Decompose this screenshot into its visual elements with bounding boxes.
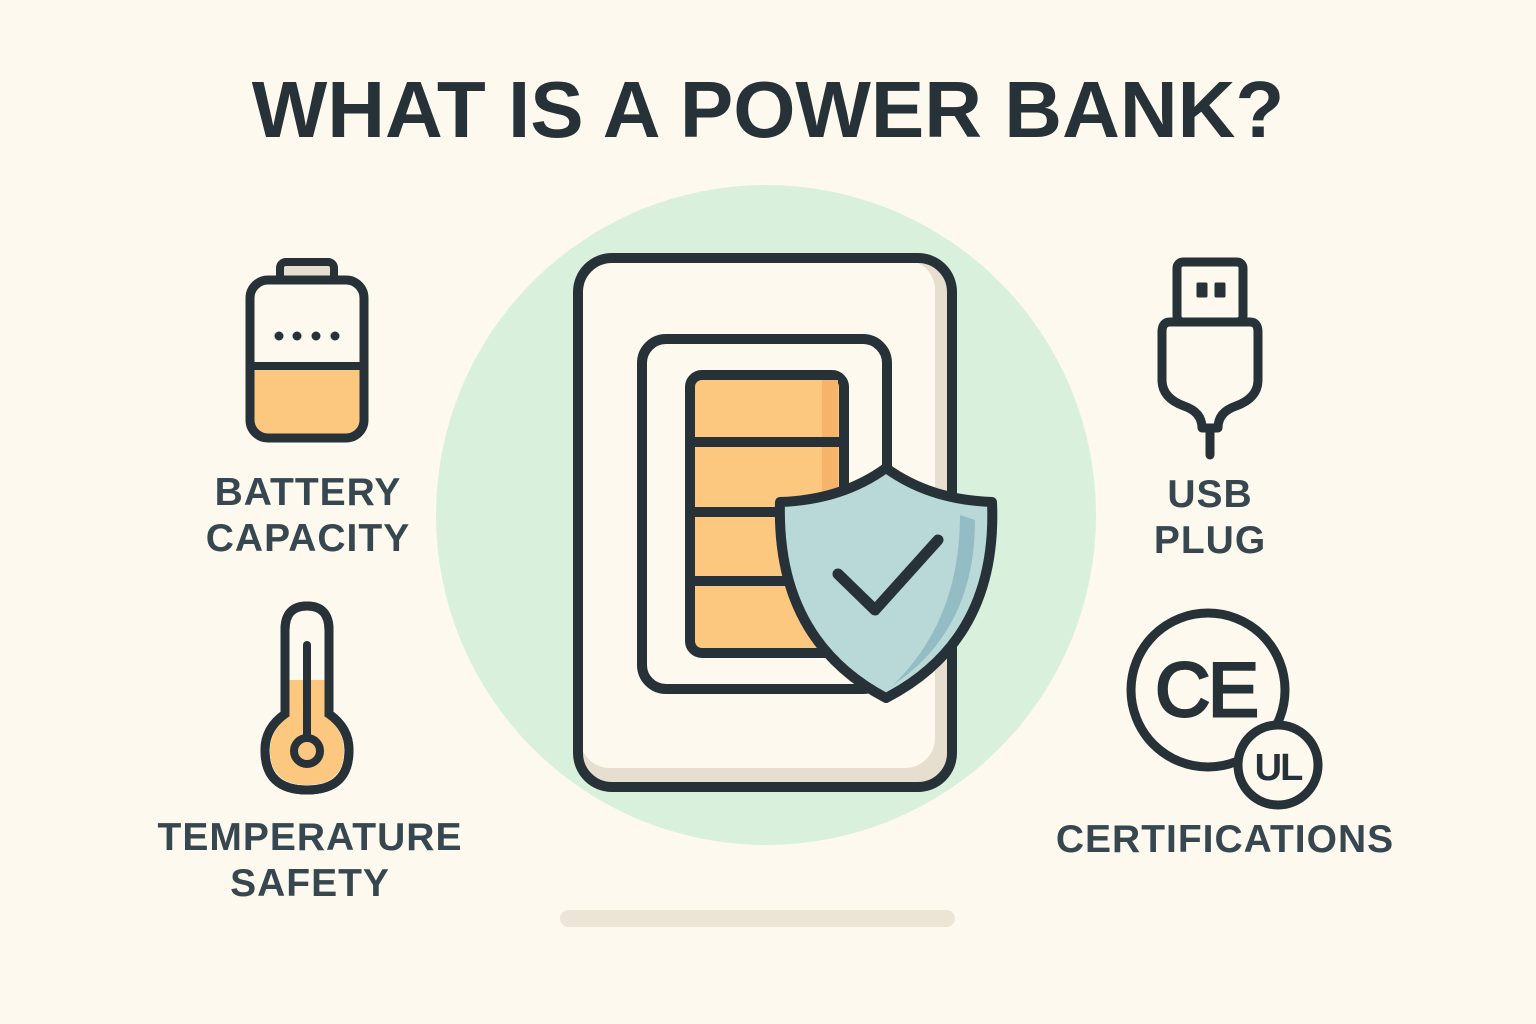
icon: battery (250, 262, 364, 438)
label: temperature safety: SAFETY (230, 862, 390, 905)
label: usb plug (1154, 473, 1266, 562)
icon: thermometer (265, 606, 349, 790)
label: usb plug: PLUG (1154, 519, 1266, 562)
label: temperature safety: TEMPERATURE (158, 816, 462, 859)
label: battery capacity: BATTERY (215, 471, 401, 514)
icon: certifications (1131, 613, 1318, 805)
icon: shield with check (780, 468, 992, 698)
ground shadow (560, 910, 955, 927)
label: battery capacity (206, 471, 410, 560)
icon: usb plug (1162, 262, 1258, 455)
title: WHAT IS A POWER BANK? (252, 65, 1284, 154)
icon: certifications: CE (1155, 648, 1257, 733)
label: battery capacity: CAPACITY (206, 517, 410, 560)
label: certifications: CERTIFICATIONS (1056, 818, 1394, 861)
background circle (436, 185, 1096, 845)
label: temperature safety (158, 816, 462, 905)
label: usb plug: USB (1167, 473, 1253, 516)
icon: certifications: UL (1255, 747, 1303, 789)
battery cells (690, 375, 844, 653)
power bank device (578, 258, 952, 787)
